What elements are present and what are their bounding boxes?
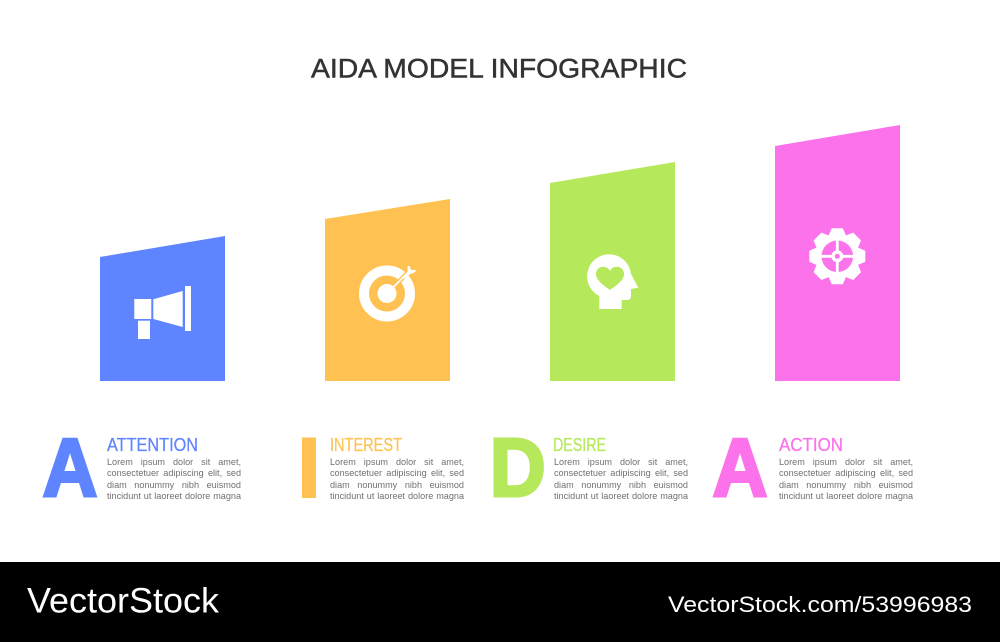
text block: desire: [554, 457, 688, 501]
text block: interest: [330, 457, 464, 501]
big letter I (interest): [302, 438, 316, 498]
icon: gear: [809, 228, 865, 284]
text block: desire: tincidunt ut laoreet dolore magna: [554, 491, 688, 501]
panel: interest bar: [325, 199, 450, 381]
icon: head with heart: [587, 254, 638, 309]
text block: action: Lorem ipsum dolor sit amet,: [779, 457, 913, 467]
icon: megaphone: [134, 286, 191, 339]
text block: desire: consectetuer adipiscing elit, sed: [554, 468, 688, 478]
text block: attention: tincidunt ut laoreet dolore magna: [107, 491, 241, 501]
text block: action: diam nonummy nibh euismod: [779, 480, 913, 490]
panel: action bar: [775, 125, 900, 381]
text block: action: tincidunt ut laoreet dolore magna: [779, 491, 913, 501]
text block: action: [779, 457, 914, 501]
text block: interest: Lorem ipsum dolor sit amet,: [330, 457, 464, 467]
panel: attention bar: [100, 236, 225, 381]
text block: attention: diam nonummy nibh euismod: [107, 480, 241, 490]
footer url: VectorStock.com/53996983: [668, 592, 972, 617]
footer bar: [0, 562, 1000, 642]
heading: desire: DESIRE: [553, 435, 606, 455]
text block: action: consectetuer adipiscing elit, sed: [779, 468, 913, 478]
text block: attention: Lorem ipsum dolor sit amet,: [107, 457, 241, 467]
heading: action: ACTION: [779, 435, 843, 455]
text block: attention: [107, 457, 242, 501]
big letter A (attention): A: [42, 421, 98, 514]
panel: desire bar: [550, 162, 675, 381]
text block: interest: tincidunt ut laoreet dolore magna: [330, 491, 464, 501]
text block: interest: consectetuer adipiscing elit, sed: [330, 468, 464, 478]
text block: attention: consectetuer adipiscing elit, sed: [107, 468, 241, 478]
text block: desire: Lorem ipsum dolor sit amet,: [554, 457, 688, 467]
heading: interest: INTEREST: [330, 435, 402, 455]
heading: attention: ATTENTION: [107, 435, 198, 455]
icon: target with arrow: [364, 266, 416, 316]
big letter D (desire): D: [490, 421, 546, 514]
footer logo: VectorStock: [27, 581, 219, 621]
title: AIDA MODEL INFOGRAPHIC: [311, 54, 687, 84]
big letter A (action): A: [712, 421, 768, 514]
text block: desire: diam nonummy nibh euismod: [554, 480, 688, 490]
text block: interest: diam nonummy nibh euismod: [330, 480, 464, 490]
